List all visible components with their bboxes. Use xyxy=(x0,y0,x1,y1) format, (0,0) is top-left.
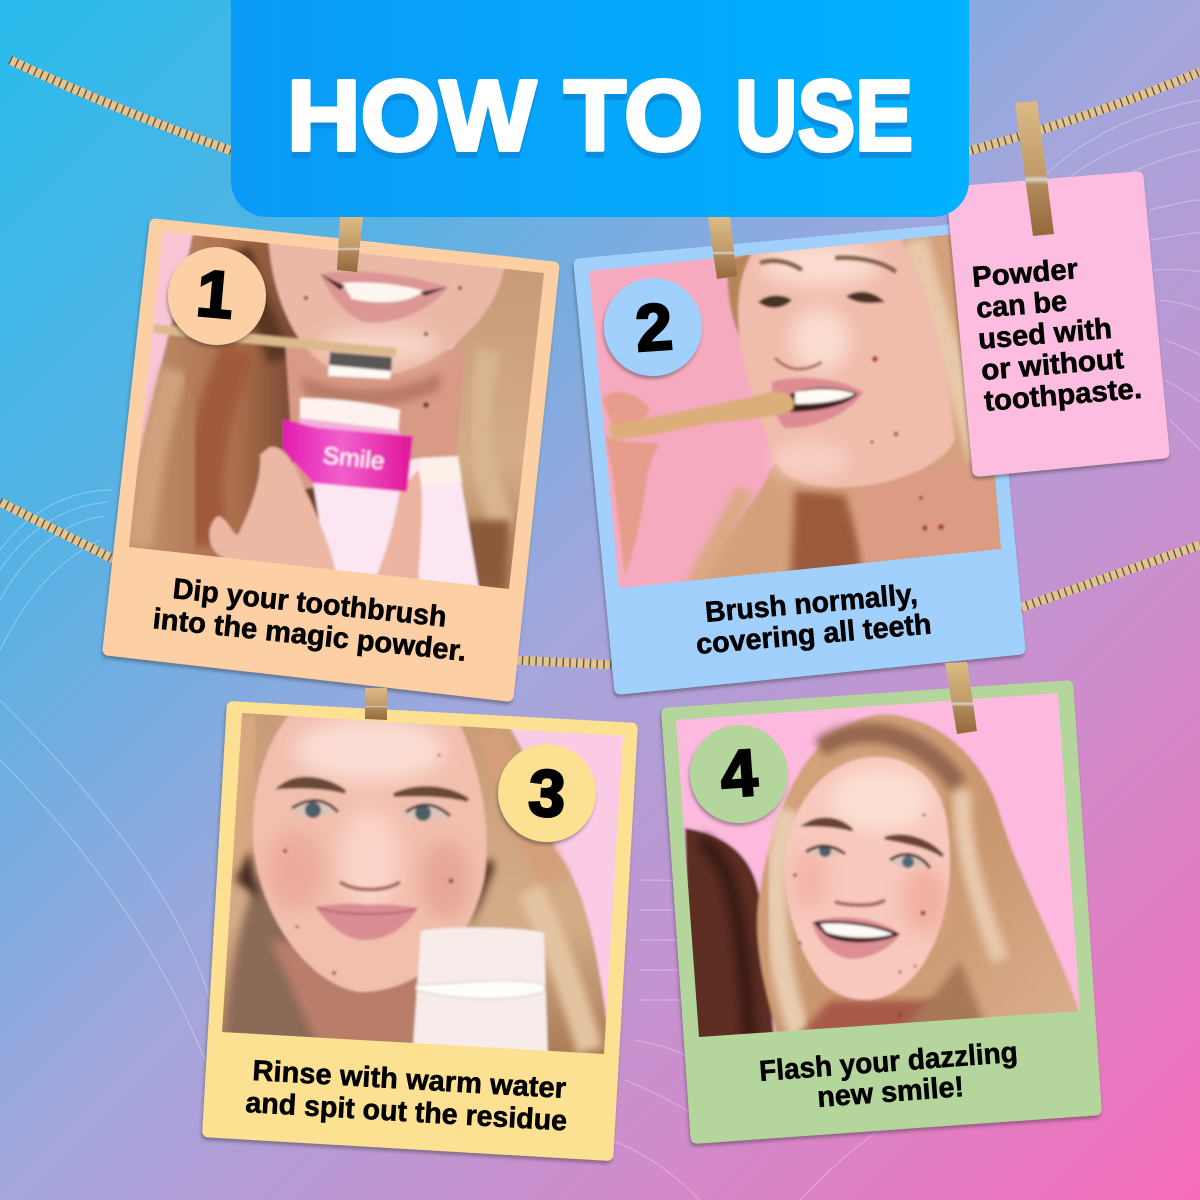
step 1 photo xyxy=(120,225,550,595)
clothespin: tip note xyxy=(1015,101,1054,236)
step 2 number badge: 2 xyxy=(633,289,675,365)
note text: Powder xyxy=(971,253,1079,294)
clothespin: step 3 xyxy=(365,688,387,720)
note paper xyxy=(952,178,1164,470)
step 3 caption: and spit out the residue xyxy=(245,1087,568,1138)
step 2 frame xyxy=(580,228,1019,688)
rope segments xyxy=(0,60,1200,665)
step 1 number badge: 1 xyxy=(194,255,237,332)
step 2 number badge xyxy=(604,278,702,376)
step 1 caption: Dip your toothbrush xyxy=(171,573,448,634)
title: HOW xyxy=(287,60,537,172)
title xyxy=(287,60,913,172)
step 2 caption: covering all teeth xyxy=(695,609,933,661)
step 1 photo: Smile xyxy=(321,442,386,475)
note text: can be xyxy=(975,285,1068,325)
clothespin: step 4 xyxy=(945,662,977,734)
panel: tip note xyxy=(952,178,1164,470)
panel: step 3 card xyxy=(200,700,640,1155)
step 4 frame xyxy=(667,686,1096,1138)
note text xyxy=(971,253,1143,418)
panel: step 1 card xyxy=(109,225,553,695)
banner shape xyxy=(231,0,969,217)
panel: step 2 card xyxy=(580,225,1019,688)
clothespin: step 1 xyxy=(337,217,363,272)
step 1 caption xyxy=(151,573,468,668)
step 3 caption: Rinse with warm water xyxy=(252,1055,567,1105)
step 4 photo xyxy=(676,693,1080,1037)
title shadow: USE xyxy=(735,66,913,178)
step 1 frame xyxy=(109,225,553,695)
step 4 number badge xyxy=(690,725,788,823)
header banner xyxy=(231,0,969,217)
title shadow: HOW xyxy=(287,66,537,178)
clothespin: step 2 xyxy=(708,217,737,279)
step 3 number badge: 3 xyxy=(527,755,567,831)
step 3 photo xyxy=(222,713,623,1054)
step 3 caption xyxy=(245,1055,568,1138)
step 1 number badge xyxy=(168,247,266,345)
title shadow xyxy=(287,66,913,178)
step 2 caption: Brush normally, xyxy=(704,579,919,629)
step 4 number badge: 4 xyxy=(718,735,760,811)
title: TO xyxy=(564,60,703,172)
title: USE xyxy=(735,60,913,172)
note text: or without xyxy=(980,343,1125,387)
step 3 frame xyxy=(208,707,632,1155)
step 2 caption xyxy=(695,579,933,661)
step 4 caption: new smile! xyxy=(816,1071,965,1114)
step 2 photo xyxy=(580,225,1010,595)
panel: step 4 card xyxy=(660,680,1096,1138)
step 4 caption: Flash your dazzling xyxy=(758,1037,1019,1088)
title shadow: TO xyxy=(564,66,703,178)
note text: used with xyxy=(977,313,1113,356)
step 3 number badge xyxy=(498,744,596,842)
note text: toothpaste. xyxy=(983,373,1143,418)
step 1 caption: into the magic powder. xyxy=(151,603,468,668)
step 4 caption xyxy=(758,1037,1019,1114)
